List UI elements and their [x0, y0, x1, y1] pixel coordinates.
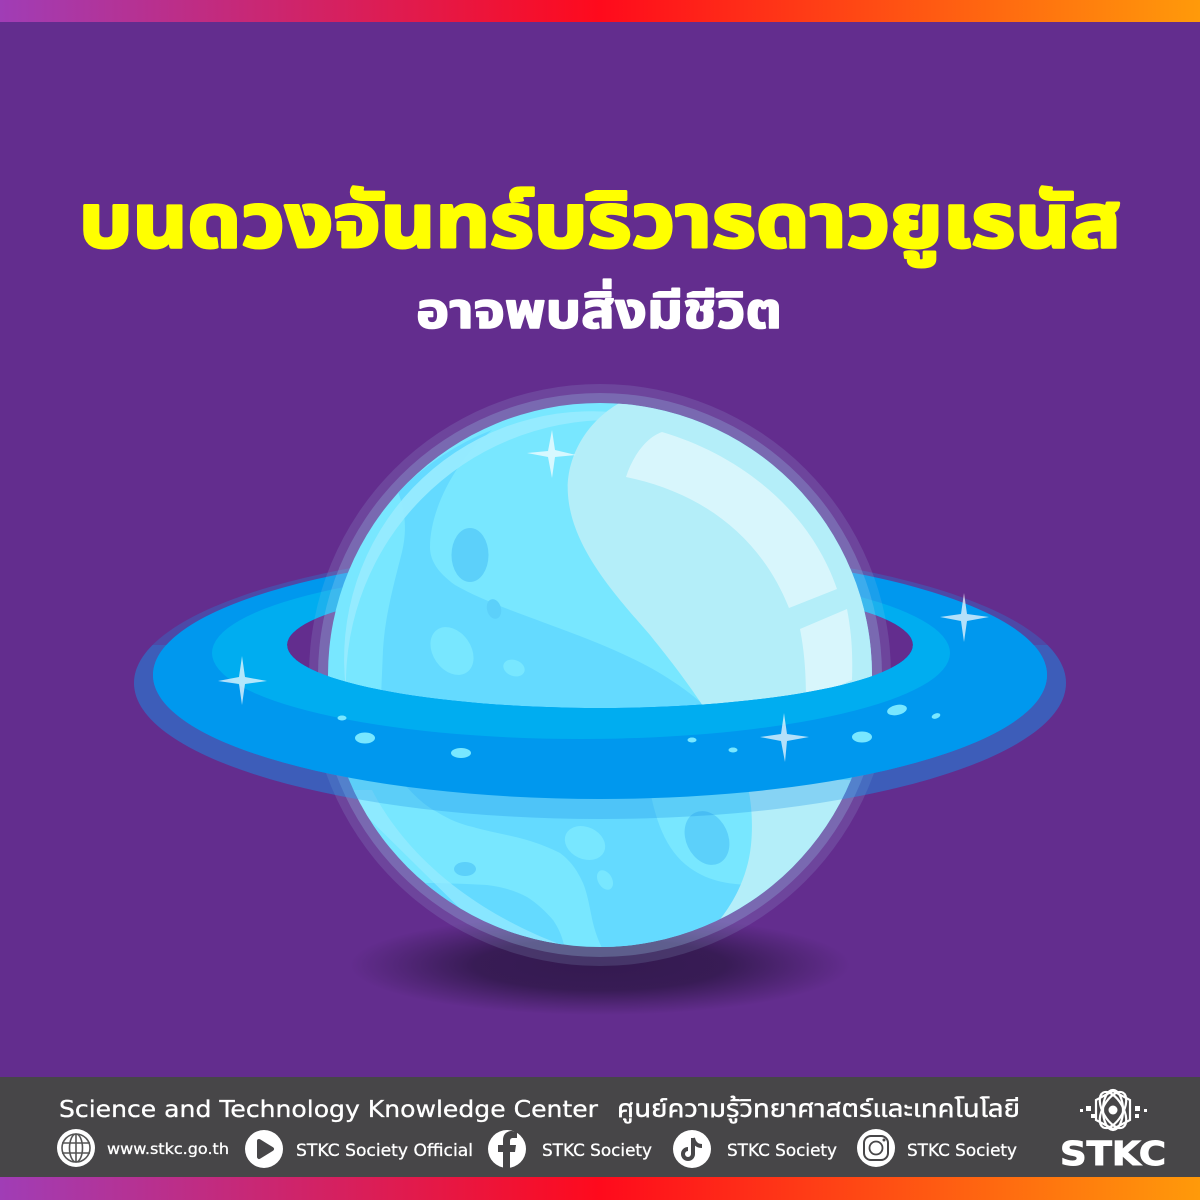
- lower right highlight: [720, 780, 851, 919]
- tiktok text: STKC Society: [727, 1141, 837, 1160]
- play icon: [245, 1130, 283, 1168]
- youtube text: STKC Society Official: [296, 1141, 473, 1160]
- rim highlight upper: [344, 411, 612, 690]
- subtitle: อาจพบสิ่งมีชีวิต: [416, 279, 782, 339]
- top gradient bar: [0, 0, 1200, 22]
- website icon: [57, 1129, 95, 1167]
- tiktok icon: [673, 1130, 711, 1168]
- crater spots upper: [430, 528, 524, 676]
- lower light terrain: [652, 792, 752, 884]
- bright reflection: [626, 432, 837, 608]
- planet shadow: [350, 915, 850, 1015]
- facebook text: STKC Society: [542, 1141, 652, 1160]
- lower left terrain: [425, 883, 564, 944]
- instagram text: STKC Society: [907, 1141, 1017, 1160]
- sparkles: [218, 430, 989, 762]
- ring front part: [134, 645, 1066, 819]
- lower dark terrain: [407, 787, 740, 947]
- website text: www.stkc.go.th: [107, 1140, 229, 1158]
- upper right highlight: [568, 404, 872, 704]
- crater spots lower: [454, 811, 730, 890]
- upper dark band: [380, 430, 720, 720]
- bright reflection lower: [800, 609, 852, 700]
- planet illustration: [134, 384, 1066, 966]
- footer thai name: ศูนย์ความรู้วิทยาศาสตร์และเทคโนโลยี: [617, 1095, 1020, 1124]
- instagram icon: [857, 1129, 895, 1167]
- footer english name: Science and Technology Knowledge Center: [59, 1097, 599, 1123]
- ring dust spots: [338, 703, 941, 758]
- planet body: [320, 395, 900, 960]
- planet halo: [309, 384, 891, 966]
- rim highlight lower: [354, 790, 558, 944]
- title: บนดวงจันทร์บริวารดาวยูเรนัส: [79, 179, 1121, 267]
- ring back part: [134, 547, 1066, 819]
- logo atom: [1080, 1088, 1147, 1132]
- facebook icon: [488, 1130, 526, 1168]
- logo wordmark: STKC: [1060, 1134, 1166, 1173]
- footer panel: [0, 1077, 1200, 1177]
- bottom gradient bar: [0, 1177, 1200, 1200]
